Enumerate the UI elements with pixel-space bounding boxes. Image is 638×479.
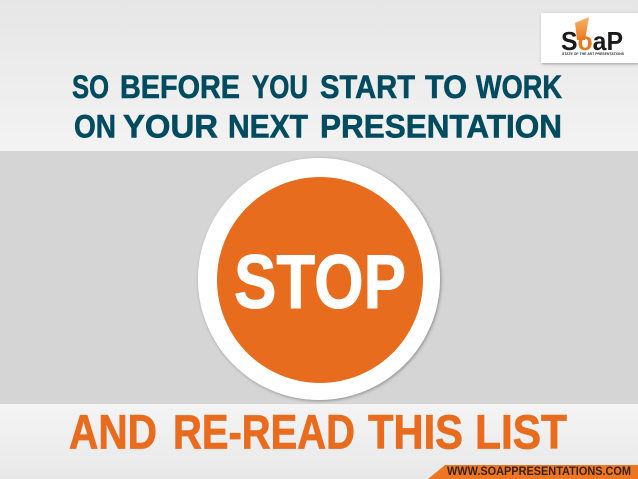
sign orange disc <box>217 177 423 383</box>
heading line 1: SO <box>72 69 109 105</box>
heading line 1: WORK <box>476 69 562 105</box>
sign label: STOP <box>234 240 406 325</box>
closing heading: THIS <box>368 406 463 460</box>
heading line 1: TO <box>425 69 467 105</box>
logo exclamation mark <box>575 17 589 40</box>
closing heading: LIST <box>475 406 567 460</box>
url banner <box>428 464 638 479</box>
heading line 1: YOU <box>252 69 308 105</box>
heading line 2: NEXT <box>228 108 308 144</box>
bottom background <box>0 404 638 479</box>
closing heading: AND <box>69 406 157 460</box>
top background <box>0 0 638 151</box>
grey band <box>0 151 638 404</box>
sign white ring <box>198 158 440 400</box>
heading line 2: PRESENTATION <box>320 108 562 144</box>
stop sign <box>198 158 440 400</box>
closing heading: RE-READ <box>173 406 355 460</box>
logo wordmark: SoaP <box>561 26 623 56</box>
heading line 1: START <box>320 69 415 105</box>
logo tagline: STATE OF THE ART PRESENTATIONS <box>562 52 625 56</box>
logo card <box>541 13 638 63</box>
heading line 2: ON <box>74 108 116 144</box>
heading line 1: BEFORE <box>120 69 240 105</box>
heading line 2: YOUR <box>123 108 218 144</box>
